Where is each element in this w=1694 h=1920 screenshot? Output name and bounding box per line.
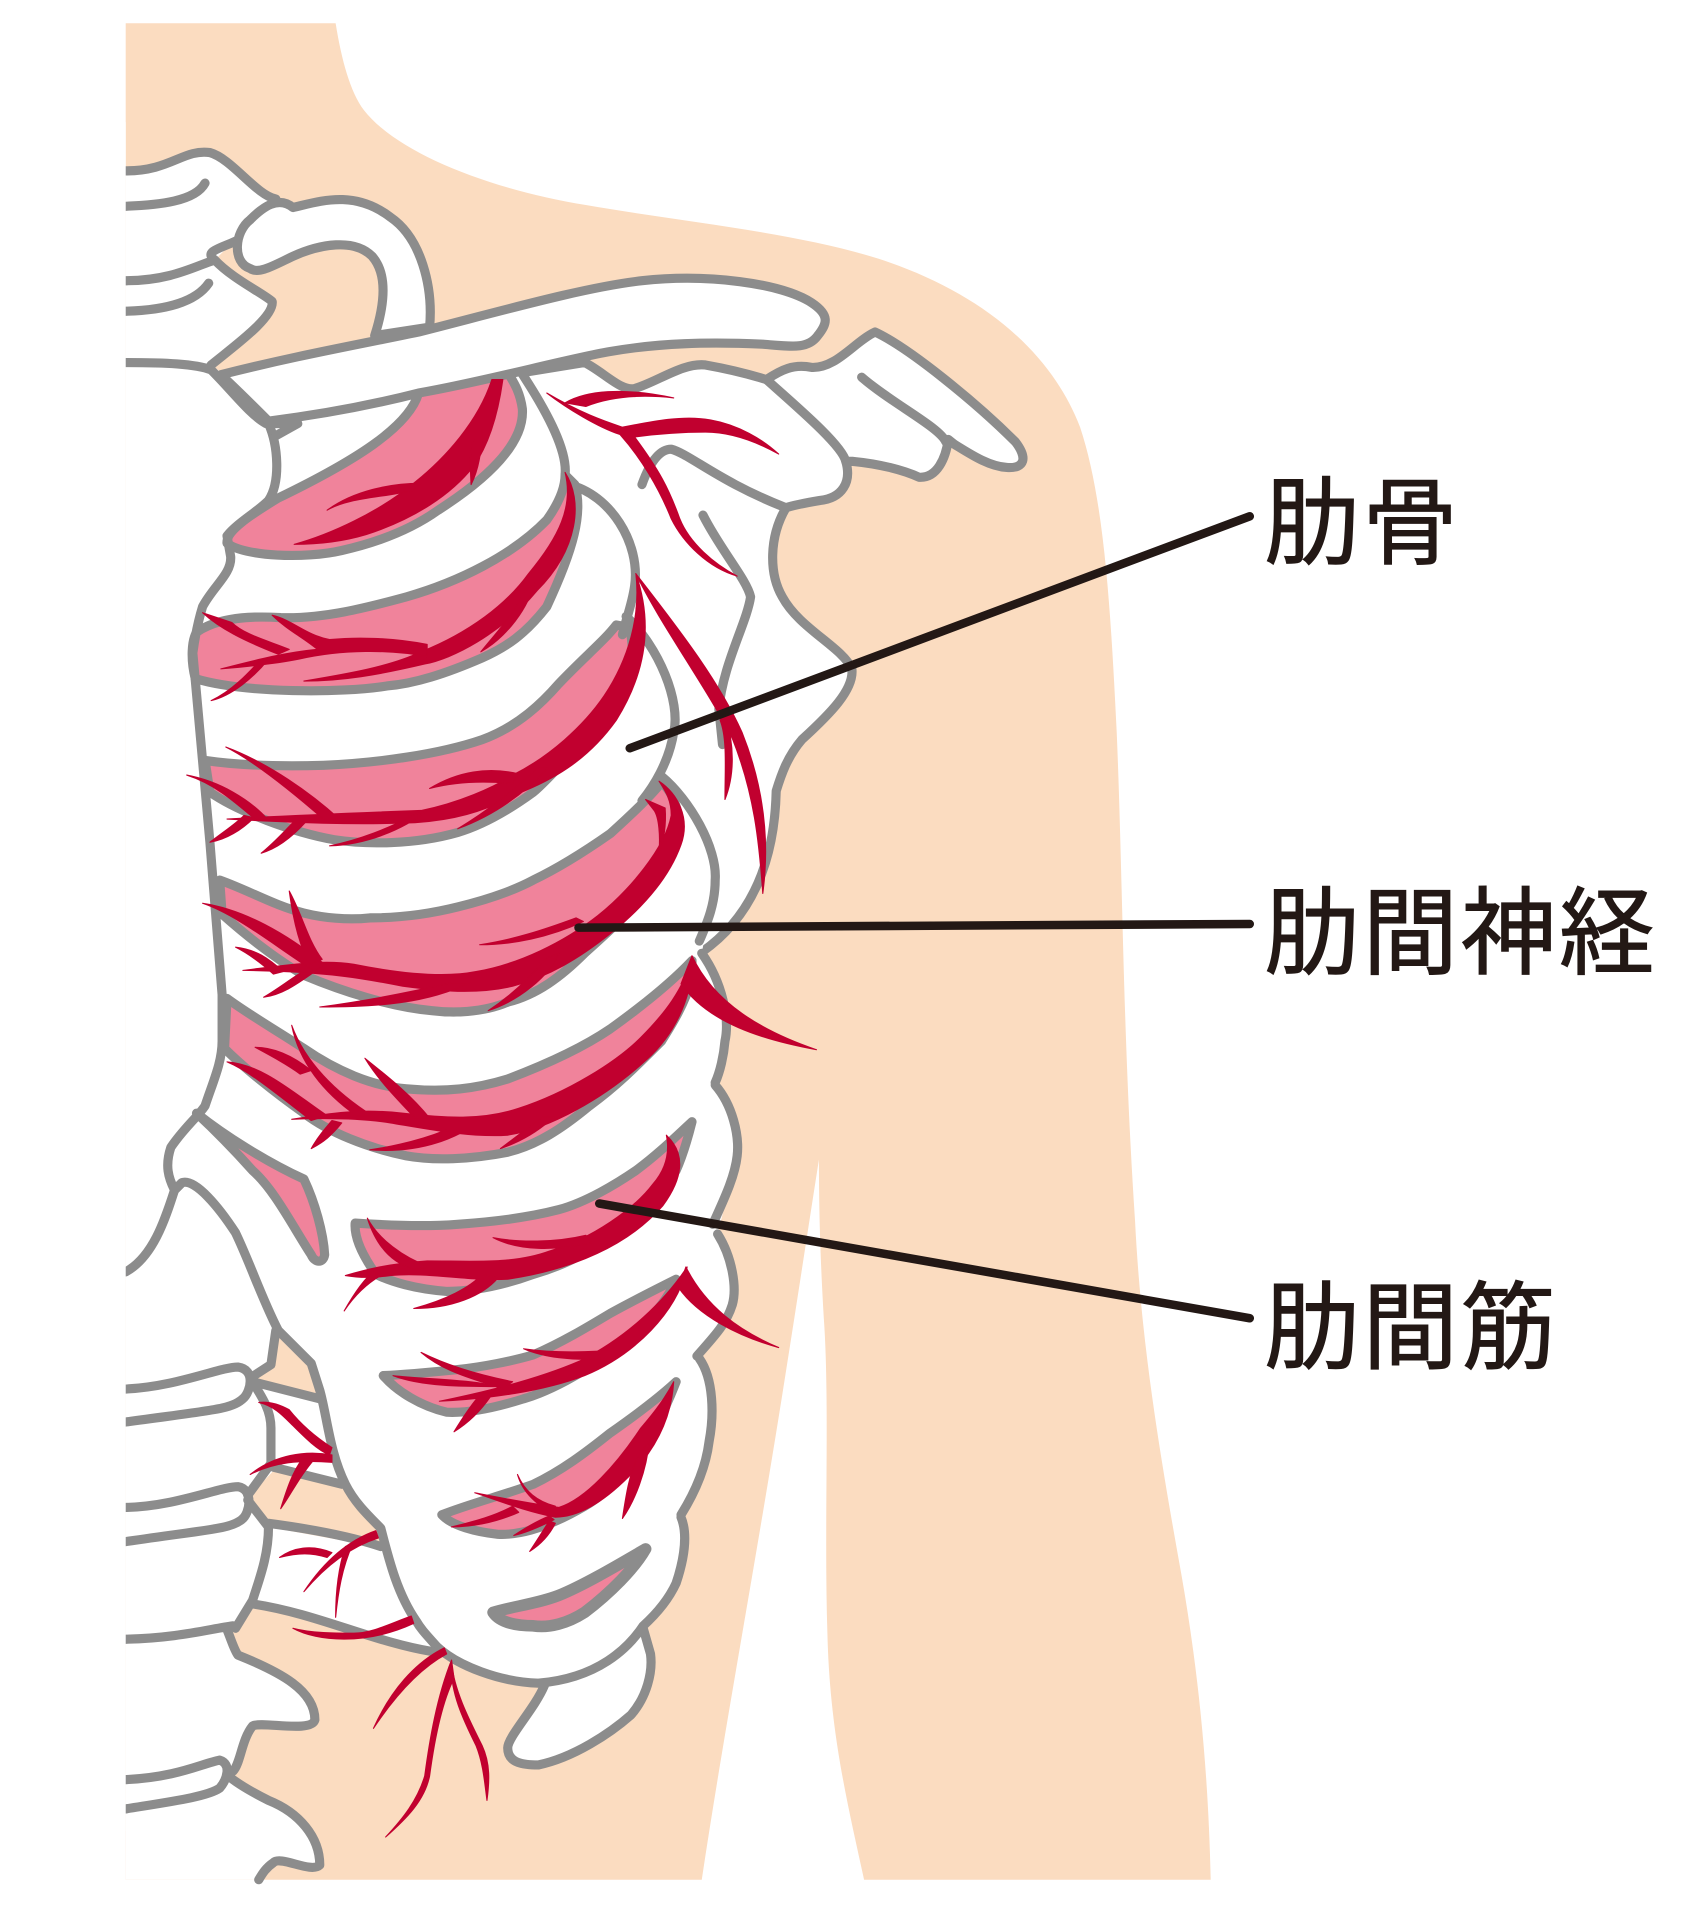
leader line: intercostal muscle (599, 1204, 1250, 1318)
intercostal muscles (192, 372, 692, 1626)
intercostal muscle 1 (227, 372, 522, 555)
label: intercostal nerve: 肋間神経 (1264, 882, 1657, 988)
label: rib: 肋骨 (1264, 472, 1461, 578)
nerve: rib space 2 (203, 472, 575, 701)
intercostal muscle 10 (493, 1549, 646, 1626)
intercostal muscle 3 (205, 625, 632, 843)
intercostal muscle 9 (442, 1382, 676, 1534)
intercostal muscle 4 (220, 782, 679, 1012)
skin gaps between posterior ribs (248, 1330, 382, 1548)
intercostal muscle 2 (192, 475, 578, 691)
sternum and vertebrae white area (126, 152, 439, 1880)
nerve: rib space 3 (187, 574, 645, 853)
nerve: rib space 4 (203, 781, 684, 1011)
nerve: top axillary branch (547, 391, 779, 576)
intercostal muscle 5 (225, 961, 692, 1159)
nerve: rib space 8 (393, 1267, 779, 1432)
intercostal muscle 8 (383, 1279, 676, 1412)
label: intercostal muscle: 肋間筋 (1264, 1276, 1559, 1382)
ribcage silhouette (166, 372, 738, 1683)
nerve: rib space 5 (227, 956, 816, 1150)
first rib (237, 200, 430, 336)
nerve: rib space 9 (452, 1382, 674, 1551)
nerve: rib space 1 (294, 380, 503, 544)
intercostal nerves (187, 380, 816, 1837)
clavicle (221, 278, 825, 421)
leader line: intercostal nerve (578, 924, 1250, 928)
bone outlines (126, 152, 738, 1880)
torso and arm silhouette (126, 23, 1211, 1880)
scapula (525, 332, 1023, 952)
nerves: lower posterior branches (250, 1402, 489, 1837)
floating rib (508, 1628, 651, 1765)
nerve: long thoracic (636, 574, 766, 893)
leader line: rib (630, 516, 1250, 748)
intercostal muscle 6 (196, 1113, 325, 1261)
nerve: rib space 7 (344, 1135, 680, 1311)
intercostal muscle 7 (355, 1122, 692, 1291)
